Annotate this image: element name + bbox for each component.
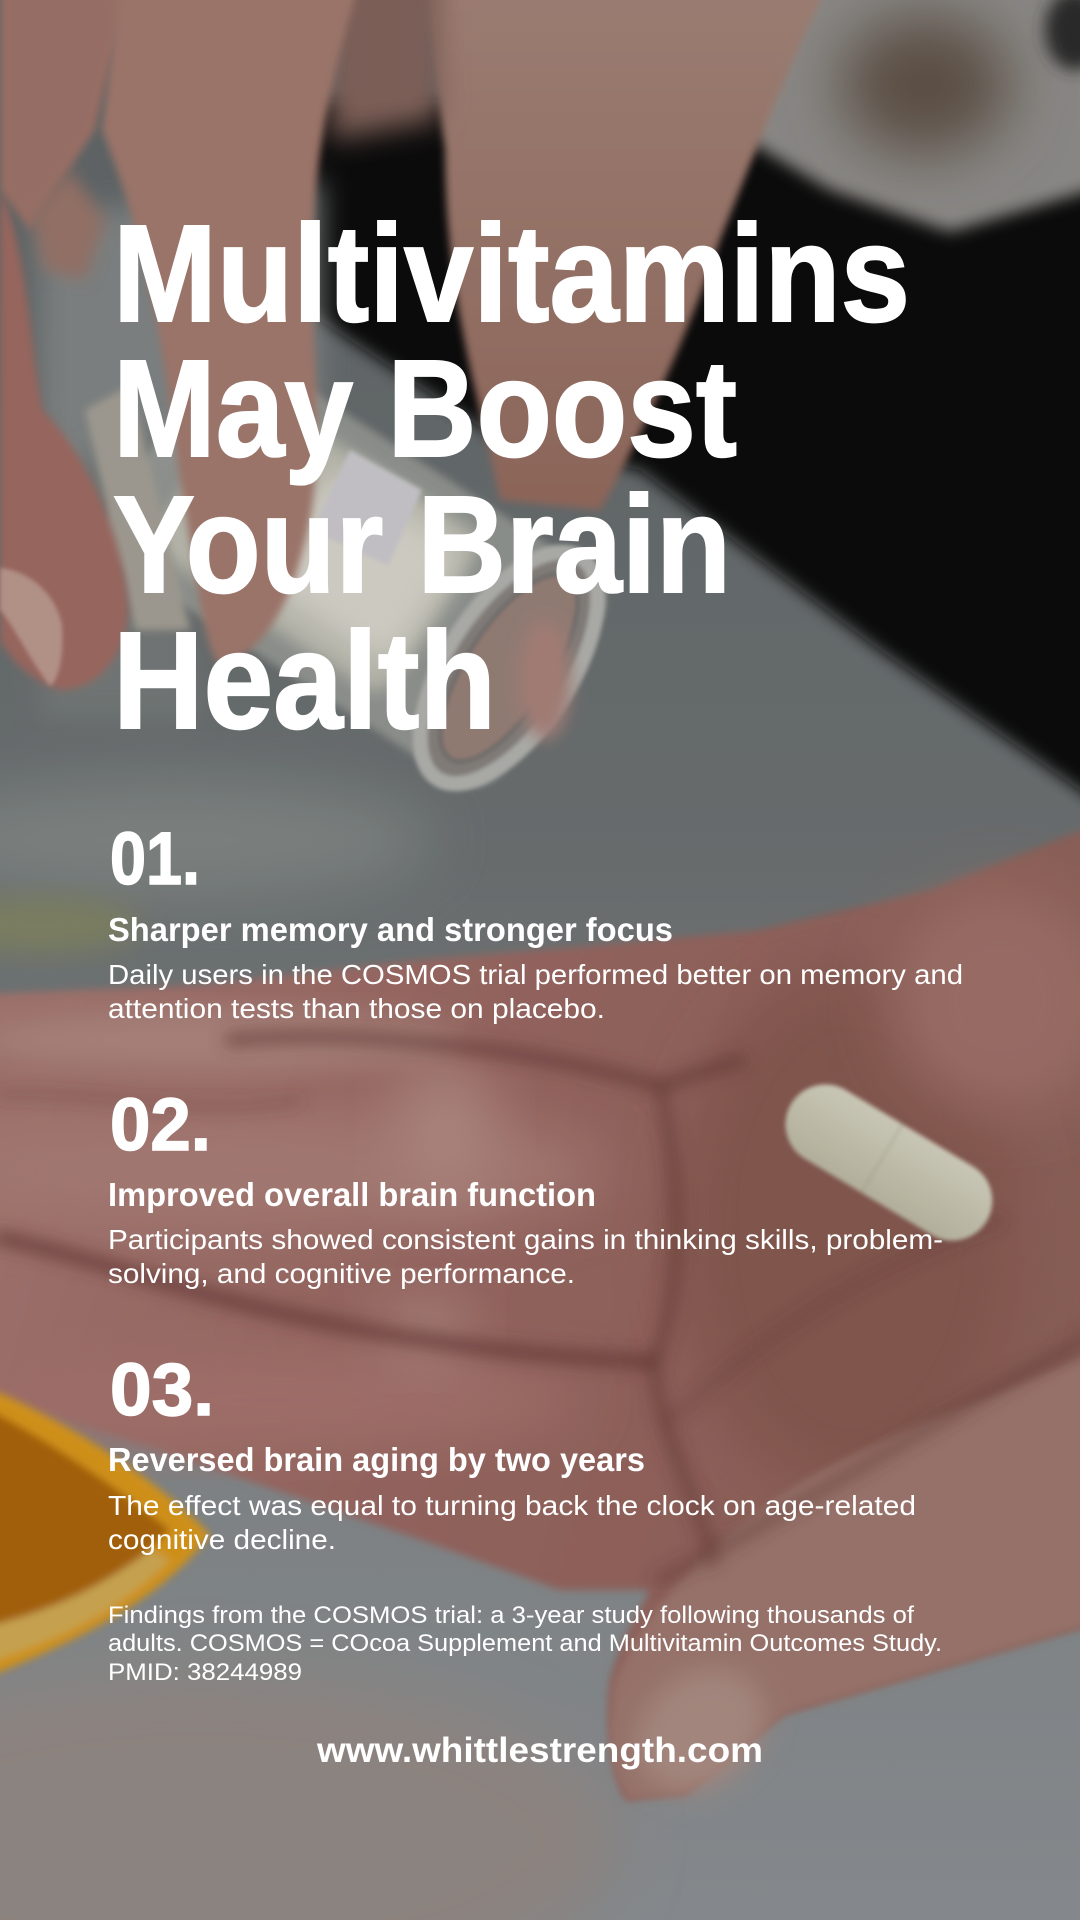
hand and fingers bbox=[0, 815, 1080, 1800]
body 3: cognitive decline. bbox=[108, 1524, 336, 1555]
footnote bbox=[108, 1602, 942, 1686]
body 1: attention tests than those on placebo. bbox=[108, 993, 605, 1024]
title: Multivitamins bbox=[113, 197, 910, 351]
blurred blister pack behind bbox=[0, 780, 430, 900]
body 2: solving, and cognitive performance. bbox=[108, 1258, 575, 1289]
website url: www.whittlestrength.com bbox=[316, 1731, 763, 1770]
point 3 bbox=[108, 1348, 916, 1555]
body 2 bbox=[108, 1224, 943, 1289]
finger over bottle bbox=[102, 0, 365, 665]
thumb nail bbox=[0, 568, 62, 686]
title: Health bbox=[113, 604, 496, 758]
body 2: Participants showed consistent gains in thinking skills, problem- bbox=[108, 1224, 943, 1255]
heading 2: Improved overall brain function bbox=[108, 1176, 596, 1213]
bottom left warm table tone bbox=[0, 1670, 620, 1920]
label paper near thumb bbox=[85, 385, 190, 630]
body 1: Daily users in the COSMOS trial performed better on memory and bbox=[108, 959, 963, 990]
body 1 bbox=[108, 959, 963, 1024]
palm shading bbox=[680, 970, 1020, 1490]
point 2 bbox=[108, 1083, 943, 1289]
top dark backdrop bbox=[290, 100, 1080, 850]
top fingers bbox=[420, 0, 840, 510]
bottle label bbox=[312, 450, 422, 565]
finger creases bbox=[0, 1037, 1080, 1580]
bottle bbox=[85, 328, 633, 812]
point 1 bbox=[108, 817, 963, 1024]
heading 3: Reversed brain aging by two years bbox=[108, 1441, 645, 1478]
left thumb bbox=[0, 190, 128, 690]
body 3 bbox=[108, 1490, 916, 1555]
capsule bbox=[771, 1070, 1007, 1256]
top right fabric bbox=[730, 0, 1080, 232]
lemon slice bbox=[0, 1385, 210, 1680]
bottle rim bbox=[385, 523, 633, 812]
footnote: Findings from the COSMOS trial: a 3-year study following thousands of bbox=[108, 1602, 914, 1629]
title bbox=[113, 197, 910, 758]
number 02: 02. bbox=[110, 1083, 211, 1166]
footnote: PMID: 38244989 bbox=[108, 1659, 302, 1686]
heading 1: Sharper memory and stronger focus bbox=[108, 911, 673, 948]
footnote: adults. COSMOS = COcoa Supplement and Multivitamin Outcomes Study. bbox=[108, 1630, 942, 1657]
number 03: 03. bbox=[110, 1348, 214, 1431]
bottle glass body bbox=[89, 334, 619, 800]
knuckle highlights bbox=[395, 1060, 495, 1200]
title: Your Brain bbox=[113, 468, 731, 622]
number 01: 01. bbox=[110, 817, 200, 900]
fingertip seen through glass bbox=[519, 620, 571, 740]
body 3: The effect was equal to turning back the clock on age-related bbox=[108, 1490, 916, 1521]
title: May Boost bbox=[113, 332, 737, 486]
thumb of open hand bbox=[610, 1340, 1080, 1800]
